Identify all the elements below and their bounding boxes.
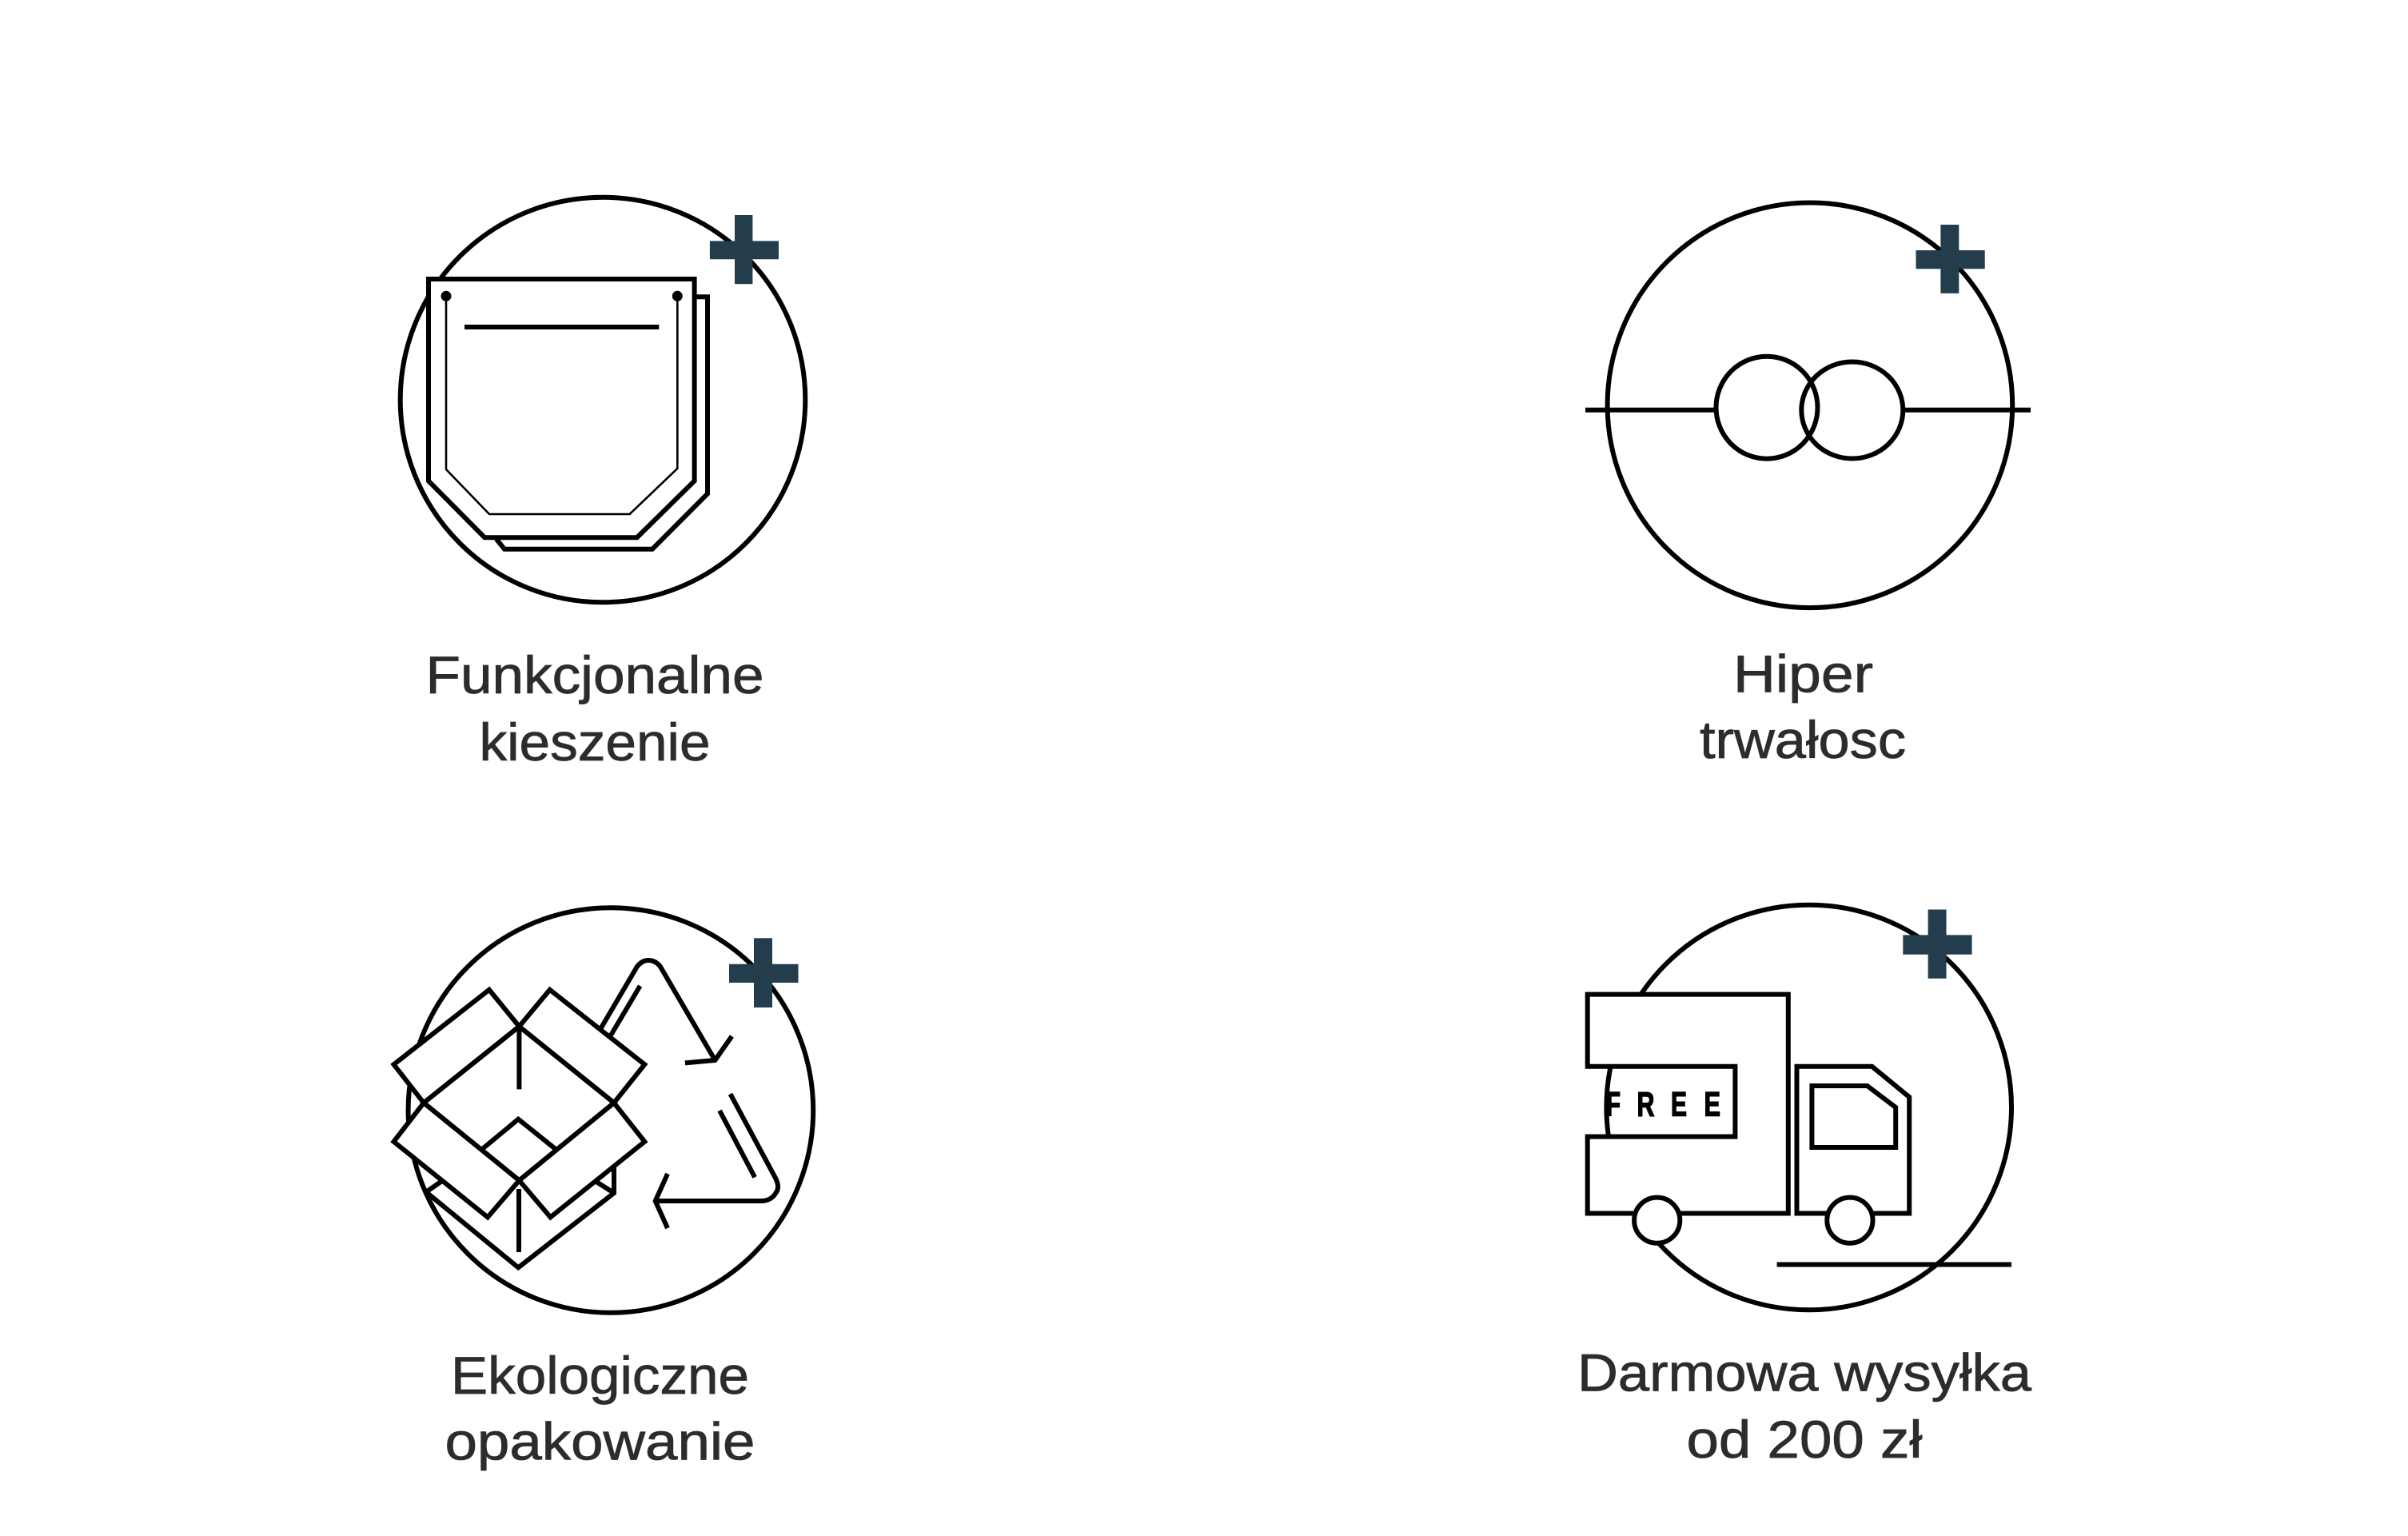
front wheel [1827,1198,1872,1243]
panel: functional pockets [401,197,805,772]
label: Hiper trwałosc: Hiper [1733,644,1873,704]
plus mark [729,938,798,1007]
circle outline [401,197,805,602]
label: Funkcjonalne kieszenie: Funkcjonalne [425,645,764,704]
box flaps [393,990,644,1217]
plus mark [710,215,779,284]
icon: box with recycling arrows [393,908,813,1313]
FREE lettering: E [1704,1085,1720,1123]
plus mark [1903,910,1971,979]
label: Funkcjonalne kieszenie: kieszenie [480,712,710,772]
rivets [441,291,683,301]
panel: hyper durability [1585,202,2031,769]
pocket slit [464,325,659,329]
label: Hiper trwałosc: trwałosc [1700,710,1906,769]
FREE lettering: F [1606,1085,1621,1123]
icon: delivery truck [1588,905,2011,1310]
box lower edges [425,1165,614,1267]
thread [1585,408,2031,413]
FREE lettering: R [1637,1085,1655,1123]
front pocket [429,279,695,537]
road line [1777,1262,2011,1267]
label: Ekologiczne opakowanie: Ekologiczne [451,1346,749,1405]
label: Ekologiczne opakowanie [445,1346,755,1470]
label: Darmowa wysyłka od 200 zł: Darmowa wysyłka [1577,1343,2031,1402]
box body [428,1135,614,1267]
FREE lettering [1606,1085,1720,1123]
label: Darmowa wysyłka od 200 zł [1577,1343,2031,1469]
label: Hiper trwałosc [1700,644,1906,769]
pocket stitching [446,296,677,514]
panel: ecological packaging [393,908,813,1470]
left ring [1716,357,1818,459]
plus mark [1916,225,1985,293]
circle outline [1608,202,2012,608]
cab window [1812,1086,1896,1147]
icon: pocket in circle [401,197,805,602]
circle outline [409,908,813,1313]
rear wheel [1634,1198,1680,1243]
right ring [1801,361,1903,459]
label: Funkcjonalne kieszenie [425,645,764,772]
cab [1797,1067,1909,1214]
FREE lettering: E [1671,1085,1687,1123]
label: Ekologiczne opakowanie: opakowanie [445,1411,755,1470]
circle outline [1606,905,2011,1310]
label: Darmowa wysyłka od 200 zł: od 200 zł [1687,1410,1923,1469]
icon: rings on a thread [1585,202,2031,608]
cargo box [1588,995,1788,1214]
panel: free shipping [1577,905,2031,1469]
back pocket [496,297,708,549]
recycling arrows [600,960,778,1228]
